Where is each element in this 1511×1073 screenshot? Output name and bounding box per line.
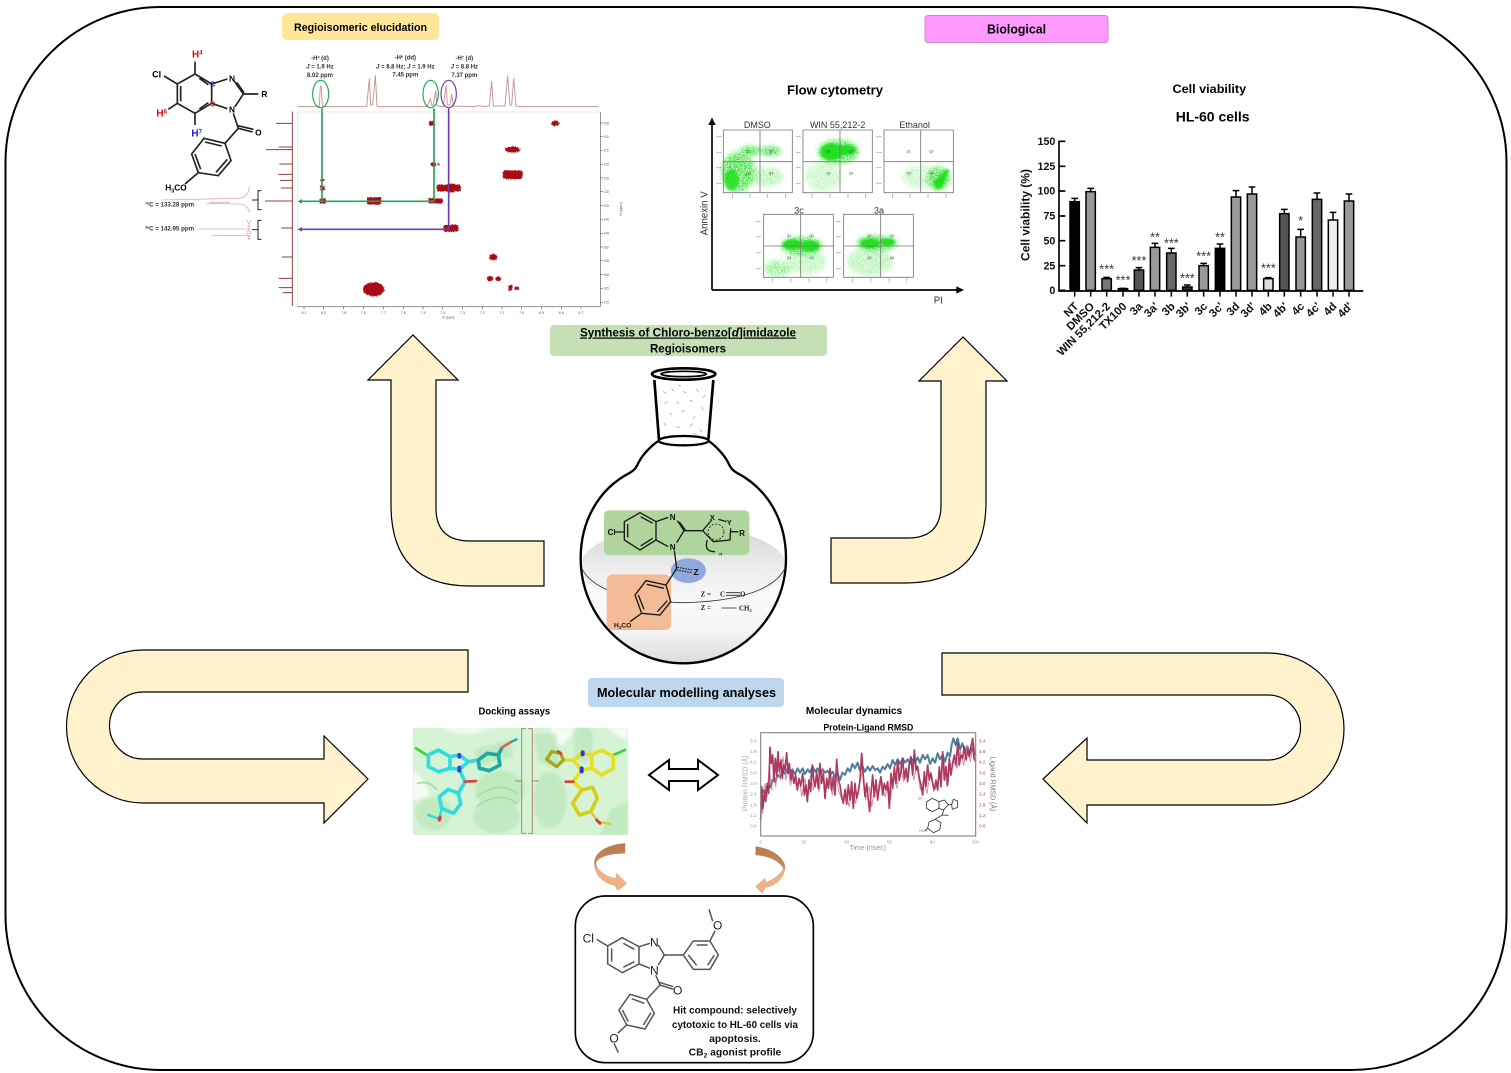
chemical structure: chloro-benzimidazole with H labels: [152, 50, 267, 194]
y axis: 125: [1038, 161, 1055, 173]
general chemical structure: CO: [621, 622, 631, 629]
dot plot: WIN 55,212-2: WIN 55,212-2: [810, 120, 865, 130]
dot plot: DMSO: DMSO: [744, 120, 771, 130]
RMSD line chart: 3.6: [750, 770, 757, 775]
significance stars: ***: [1164, 237, 1179, 251]
heading: biological: Biological: [987, 22, 1046, 36]
curved arrow: docking to hit compound: [594, 843, 627, 891]
x axis tick marks and labels: 4d: [1322, 301, 1339, 318]
general chemical structure: Cl: [608, 528, 616, 537]
panel: cell viability bar chart: [1019, 82, 1363, 359]
chemical structure: chloro-benzimidazole with H labels: C: [210, 80, 216, 89]
1H spectrum trace with proton assignments: 6: [401, 55, 403, 59]
HMBC contour plot: 155: [604, 259, 609, 263]
chart title: Protein-Ligand RMSD: [823, 722, 914, 732]
1H spectrum trace with proton assignments: J = 8.8 Hz; J = 1.9 Hz: [376, 64, 435, 70]
HMBC contour plot: 7.3: [460, 311, 465, 315]
dot plot: 3a: Q1: [867, 234, 872, 238]
x axis tick marks and labels: NT: [1062, 301, 1081, 320]
y axis: [1019, 136, 1363, 297]
hit compound description: apoptosis.: [709, 1034, 761, 1045]
dot plot: WIN 55,212-2: Q2: [849, 150, 853, 154]
general chemical structure: [608, 513, 752, 630]
HMBC contour plot: 7.6: [401, 311, 406, 315]
x axis tick marks and labels: 4b: [1257, 301, 1275, 318]
HMBC contour plot: f1 (ppm): [619, 202, 623, 216]
dot plot: 3a: Q2: [890, 234, 894, 238]
x axis tick marks and labels: 4b': [1271, 300, 1291, 320]
dot plot: DMSO: Q3: [746, 172, 751, 176]
1H spectrum trace with proton assignments: (dd): [403, 56, 416, 62]
HMBC contour plot: 7.0: [519, 311, 524, 315]
significance stars: **: [1150, 231, 1160, 245]
heading: regioisomeric elucidation: [282, 13, 439, 40]
hit compound description: 2: [704, 1052, 708, 1059]
chemical structure: chloro-benzimidazole with H labels: 4: [199, 50, 203, 56]
chemical shift labels and braces: [145, 187, 261, 240]
chemical structure: chloro-benzimidazole with H labels: H: [165, 182, 171, 192]
dot plot: WIN 55,212-2: Q1: [826, 150, 831, 154]
RMSD line chart: 0.6: [750, 824, 757, 829]
HMBC contour plot: 105: [604, 121, 609, 125]
HMBC contour plot: 160: [604, 273, 609, 277]
scatter plot axes: Annexin V: [699, 191, 710, 235]
general chemical structure: Z: [693, 567, 699, 577]
panel: flow cytometry: [699, 82, 964, 306]
x axis tick marks and labels: TX100: [1097, 301, 1129, 333]
dot plot: DMSO: Q4: [769, 172, 773, 176]
1H spectrum trace with proton assignments: J = 8.8 Hz: [451, 64, 478, 70]
highlight: Z linker: [671, 558, 706, 583]
1H spectrum trace with proton assignments: -H: [455, 56, 462, 62]
1H spectrum trace with proton assignments: [298, 55, 599, 108]
general chemical structure: Z =: [701, 604, 711, 612]
significance stars: ***: [1099, 262, 1114, 276]
RMSD line chart: 5.4: [750, 738, 757, 743]
x axis tick marks and labels: 3a': [1142, 300, 1162, 320]
chemical structure: chloro-benzimidazole with H labels: 6: [164, 109, 168, 115]
dot plot: WIN 55,212-2: [803, 120, 872, 193]
HMBC contour plot: 6.9: [539, 311, 544, 315]
general chemical structure: H: [614, 622, 619, 629]
1H spectrum trace with proton assignments: 7: [462, 55, 464, 59]
RMSD line chart: 4.8: [750, 749, 757, 754]
panel: round-bottom flask with general structure: [577, 368, 790, 667]
y axis: 50: [1043, 235, 1055, 247]
RMSD line chart: Ligand RMSD (Å): [988, 757, 997, 811]
significance stars: ***: [1196, 250, 1211, 264]
chemical structure: chloro-benzimidazole with H labels: 3: [171, 188, 174, 194]
RMSD line chart: 20: [801, 839, 807, 844]
arrow: synthesis up to regioisomeric elucidation: [368, 335, 544, 586]
RMSD line chart: [740, 733, 997, 852]
heading: molecular modelling analyses: [588, 678, 784, 707]
general chemical structure: n: [719, 551, 722, 556]
HMBC contour plot: 140: [604, 218, 609, 222]
binding site bracket: [515, 729, 539, 833]
dot plot: 3c: Q1: [787, 234, 791, 238]
significance stars: ***: [1116, 273, 1130, 287]
scatter plot axes: PI: [934, 295, 943, 306]
significance stars: ***: [1180, 271, 1195, 285]
chemical shift labels and braces: 7a: [145, 202, 150, 206]
chemical structure: chloro-benzimidazole with H labels: N: [229, 104, 235, 114]
heading: molecular dynamics: Molecular dynamics: [806, 706, 902, 717]
hit compound description: cytotoxic to HL-60 cells via: [672, 1020, 798, 1031]
1H spectrum trace with proton assignments: -H: [311, 56, 317, 62]
dot plot: Ethanol: [884, 120, 953, 193]
x axis tick marks and labels: 3d': [1239, 300, 1259, 320]
chemical structure: chloro-benzimidazole with H labels: Cl: [152, 69, 161, 79]
chemical structure: chloro-benzimidazole with H labels: H: [156, 109, 164, 120]
protein cartoon background: [413, 723, 628, 835]
HMBC contour plot: 8.0: [321, 311, 326, 315]
y axis: 0: [1049, 285, 1055, 297]
inset molecule: [918, 796, 958, 833]
dot plot: 3c: 3c: [794, 205, 804, 215]
chemical shift labels and braces: 3a: [145, 226, 150, 230]
panel: molecular dynamics RMSD plot: [740, 706, 997, 852]
heading: synthesis of regioisomers: Regioisomers: [650, 342, 726, 356]
RMSD line chart: 100: [972, 839, 980, 844]
HMBC contour plot: 120: [604, 163, 609, 167]
dot plot: 3a: 3a: [874, 205, 884, 215]
significance stars: **: [1215, 231, 1225, 245]
curved arrow: dynamics to hit compound: [756, 847, 785, 893]
heading: HL-60 cells: HL-60 cells: [1176, 109, 1250, 125]
hit compound description: [672, 1005, 798, 1059]
1H spectrum trace with proton assignments: (d): [320, 56, 329, 62]
RMSD line chart: 3.0: [750, 781, 757, 786]
significance stars: [1099, 214, 1303, 287]
dot plot: Ethanol: Ethanol: [899, 120, 930, 130]
x axis tick marks and labels: 3c: [1193, 301, 1210, 318]
general chemical structure: N: [670, 543, 676, 552]
RMSD line chart: Time (nsec): [849, 845, 886, 852]
heading: cell viability: Cell viability: [1172, 82, 1247, 96]
x axis tick marks and labels: 3a: [1128, 300, 1146, 318]
panel: 2D NMR regioisomeric elucidation: [145, 50, 623, 319]
chemical structure: chloro-benzimidazole with H labels: CO: [174, 182, 187, 192]
flask liquid: [582, 536, 785, 662]
chemical structure: chloro-benzimidazole with H labels: O: [255, 128, 262, 138]
general chemical structure: Z =: [701, 591, 711, 599]
dot plot: DMSO: Q2: [769, 150, 773, 154]
x axis tick marks and labels: 3d: [1225, 301, 1242, 318]
arrow: left U-turn to docking: [66, 650, 468, 823]
chemical shift labels and braces: C = 142.95 ppm: [149, 225, 195, 232]
flask outline: [581, 368, 786, 663]
chemical structure: chloro-benzimidazole with H labels: C: [210, 100, 216, 109]
HMBC contour plot: 7.2: [480, 311, 485, 315]
13C spectrum trace: [265, 112, 292, 306]
arrow: right U-turn to molecular dynamics: [942, 653, 1344, 823]
x axis tick marks and labels: 3b': [1174, 300, 1194, 320]
ligand: yellow pose: [547, 750, 625, 824]
bars with error bars: [1070, 187, 1354, 290]
dot plot: WIN 55,212-2: Q3: [826, 172, 831, 176]
HMBC contour plot: 7.1: [499, 311, 505, 315]
y axis: Cell viability (%): [1019, 169, 1033, 261]
RMSD line chart: 0: [759, 839, 762, 844]
1H spectrum trace with proton assignments: 7.45 ppm: [392, 73, 418, 79]
hit compound structure: N: [650, 964, 659, 978]
dot plot: 3a: [844, 205, 913, 277]
1H spectrum trace with proton assignments: 7.37 ppm: [451, 73, 477, 79]
RMSD line chart: 40: [844, 839, 850, 844]
RMSD line chart: 1.2: [979, 813, 986, 818]
dot plot: 3c: [764, 205, 833, 277]
general chemical structure: X: [710, 513, 715, 522]
hit compound structure: [583, 909, 722, 1053]
ligand: cyan pose: [416, 739, 517, 820]
HMBC contour plot: 110: [604, 135, 609, 139]
RMSD line chart: 3.0: [979, 781, 986, 786]
dot plot: 3c: Q3: [787, 256, 791, 260]
HMBC contour plot: 165: [604, 287, 609, 291]
heading: regioisomeric elucidation: Regioisomeric elucidation: [294, 22, 427, 34]
RMSD line chart: 1.8: [750, 802, 757, 807]
hit compound description: agonist profile: [707, 1047, 782, 1058]
HMBC contour plot: [297, 108, 623, 319]
RMSD line chart: 4.2: [979, 760, 986, 765]
heading: docking assays: Docking assays: [478, 706, 550, 717]
general chemical structure: 2: [749, 608, 752, 613]
HMBC contour plot: 130: [604, 190, 609, 194]
highlight: methoxyphenyl region: [607, 574, 671, 630]
heading: molecular modelling analyses: Molecular modelling analyses: [597, 685, 776, 700]
RMSD line chart: 1.8: [979, 802, 986, 807]
x axis tick marks and labels: 4c': [1304, 300, 1324, 320]
1H spectrum trace with proton assignments: (d): [464, 56, 473, 62]
dot plot: 3a: Q4: [890, 256, 894, 260]
chemical structure: chloro-benzimidazole with H labels: R: [261, 89, 267, 99]
RMSD line chart: 3.6: [979, 770, 986, 775]
general chemical structure: N: [670, 513, 676, 522]
HMBC contour plot: 145: [604, 232, 609, 236]
x axis tick marks and labels: [1055, 291, 1356, 359]
HMBC contour plot: 125: [604, 176, 609, 180]
HMBC contour plot: 7.5: [420, 311, 426, 315]
dot plot: 3c: Q4: [809, 256, 814, 260]
HMBC contour plot: 115: [604, 149, 609, 153]
hit compound structure: N: [650, 936, 659, 950]
highlight: benzimidazole region: [604, 510, 749, 555]
panel: hit compound: [575, 896, 813, 1063]
RMSD line chart: 80: [930, 839, 935, 844]
y axis: 100: [1038, 186, 1055, 198]
heading: biological: [925, 16, 1108, 42]
HMBC contour plot: f2 (ppm): [442, 315, 455, 319]
1H spectrum trace with proton assignments: -H: [395, 56, 401, 62]
arrow: synthesis up to biological: [831, 337, 1007, 583]
dot plot: Ethanol: Q2: [929, 150, 934, 154]
y axis: 25: [1043, 260, 1055, 272]
heading: synthesis of regioisomers: Synthesis of Chloro-benzo[d]imidazole: [580, 326, 796, 340]
hit compound description: CB: [689, 1047, 704, 1058]
HMBC contour plot: 7.4: [440, 311, 445, 315]
RMSD line chart: 5.4: [979, 738, 986, 743]
dot plot: Ethanol: Q3: [906, 172, 911, 176]
HMBC contour plot: 6.7: [578, 311, 584, 315]
scatter plot axes: [699, 117, 964, 306]
dot plot: 3a: Q3: [867, 256, 872, 260]
dot plot: Ethanol: Q1: [906, 150, 911, 154]
significance stars: ***: [1261, 261, 1276, 275]
dot plot: Ethanol: Q4: [929, 172, 934, 176]
HMBC contour plot: 7.7: [381, 311, 386, 315]
HMBC contour plot: 6.8: [559, 311, 564, 315]
RMSD line chart: 2.4: [750, 792, 757, 797]
hit compound structure: O: [609, 1032, 619, 1046]
x axis tick marks and labels: 3c': [1207, 300, 1227, 320]
y axis: 75: [1043, 211, 1055, 223]
general chemical structure: CH: [739, 605, 749, 613]
HMBC contour plot: 7.9: [341, 311, 346, 315]
general chemical structure: Y: [727, 518, 732, 527]
RMSD line chart: 2.4: [979, 792, 986, 797]
significance stars: ***: [1132, 254, 1146, 268]
hit compound structure: O: [713, 918, 722, 932]
x axis tick marks and labels: 3b: [1160, 301, 1178, 318]
general chemical structure: R: [739, 529, 745, 538]
heading: synthesis of regioisomers: [550, 325, 827, 356]
hit compound structure: O: [673, 983, 682, 997]
HMBC contour plot: 170: [604, 301, 609, 305]
x axis tick marks and labels: WIN 55,212-2: [1055, 301, 1113, 359]
x axis tick marks and labels: 4d': [1336, 300, 1356, 320]
chemical shift labels and braces: C = 133.28 ppm: [149, 201, 195, 208]
1H spectrum trace with proton assignments: 8.02 ppm: [307, 73, 333, 79]
RMSD line chart: 60: [887, 839, 893, 844]
x axis tick marks and labels: 4c: [1290, 301, 1307, 318]
chemical structure: chloro-benzimidazole with H labels: N: [229, 73, 235, 83]
general chemical structure: C: [720, 590, 725, 598]
x axis tick marks and labels: DMSO: [1065, 301, 1097, 333]
1H spectrum trace with proton assignments: 4: [317, 55, 320, 59]
dot plot: WIN 55,212-2: Q4: [849, 172, 853, 176]
significance stars: *: [1298, 214, 1303, 228]
hit compound structure: Cl: [583, 932, 594, 946]
general chemical structure: O: [740, 591, 746, 599]
chemical structure: chloro-benzimidazole with H labels: 7: [199, 129, 203, 135]
HMBC contour plot: 7.8: [361, 311, 366, 315]
heading: flow cytometry: Flow cytometry: [787, 82, 884, 97]
chemical structure: chloro-benzimidazole with H labels: H: [191, 129, 199, 140]
inset molecule: Cl: [918, 796, 922, 800]
dot plot: DMSO: Q1: [746, 150, 751, 154]
RMSD line chart: 0.6: [979, 824, 986, 829]
dot plot: DMSO: [722, 120, 792, 193]
RMSD line chart: 4.8: [979, 749, 986, 754]
double arrow between docking and dynamics: [649, 760, 718, 790]
y axis: 150: [1038, 136, 1055, 148]
chemical structure: chloro-benzimidazole with H labels: H: [192, 50, 199, 61]
HMBC contour plot: 8.1: [301, 311, 307, 315]
general chemical structure: 3: [619, 625, 622, 630]
inset molecule: H₃CO: [919, 829, 928, 833]
1H spectrum trace with proton assignments: J = 1.9 Hz: [306, 64, 334, 70]
RMSD line chart: 1.2: [750, 813, 757, 818]
hit compound description: Hit compound: selectively: [673, 1005, 797, 1016]
RMSD line chart: Protein RMSD (Å): [740, 755, 749, 811]
RMSD line chart: 4.2: [750, 760, 757, 765]
HMBC contour plot: 135: [604, 204, 609, 208]
HMBC contour plot: 150: [604, 245, 609, 249]
dot plot: 3c: Q2: [809, 234, 814, 238]
panel: docking assays: [413, 706, 628, 835]
